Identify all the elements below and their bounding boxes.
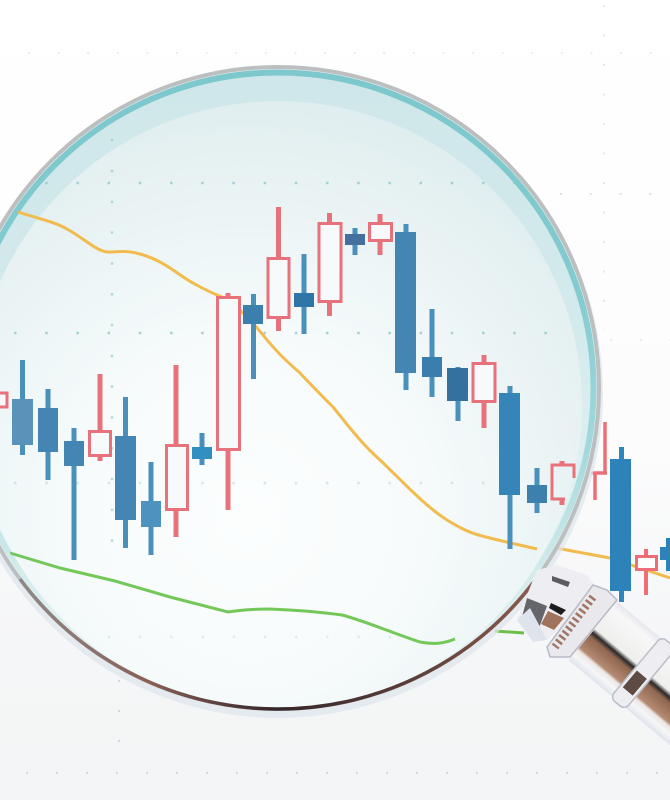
- magnifier handle: [510, 560, 670, 761]
- magnifying lens: [0, 67, 599, 709]
- lens metal rim: [0, 67, 599, 709]
- chart inside the lens: [0, 139, 600, 643]
- dark lower rim: [20, 579, 533, 709]
- rear barrel: [626, 650, 670, 760]
- red candle: [644, 549, 648, 595]
- chart lines outside the lens: [495, 548, 670, 633]
- inner glass highlight: [0, 101, 582, 709]
- knurled ring: [547, 585, 617, 657]
- orange line outside lens: [556, 548, 670, 578]
- orange moving average line: [18, 212, 537, 549]
- wicks: [22, 207, 562, 560]
- red hollow candle bodies: [0, 224, 574, 510]
- green line outside lens: [495, 631, 524, 633]
- candlesticks outside the lens: [591, 422, 670, 602]
- chrome ring: [610, 636, 670, 710]
- lens shadow: [0, 278, 603, 718]
- front barrel: [569, 602, 662, 697]
- red candle stub: [595, 422, 605, 500]
- blue candle: [619, 447, 624, 602]
- green moving average line: [10, 553, 455, 643]
- teal glass edge: [0, 72, 594, 704]
- handle collar: [517, 565, 594, 642]
- blue candle at edge: [666, 538, 670, 571]
- blue candle bodies: [12, 232, 547, 527]
- lens grid dots: [14, 139, 600, 637]
- handle barrel group: [567, 600, 670, 761]
